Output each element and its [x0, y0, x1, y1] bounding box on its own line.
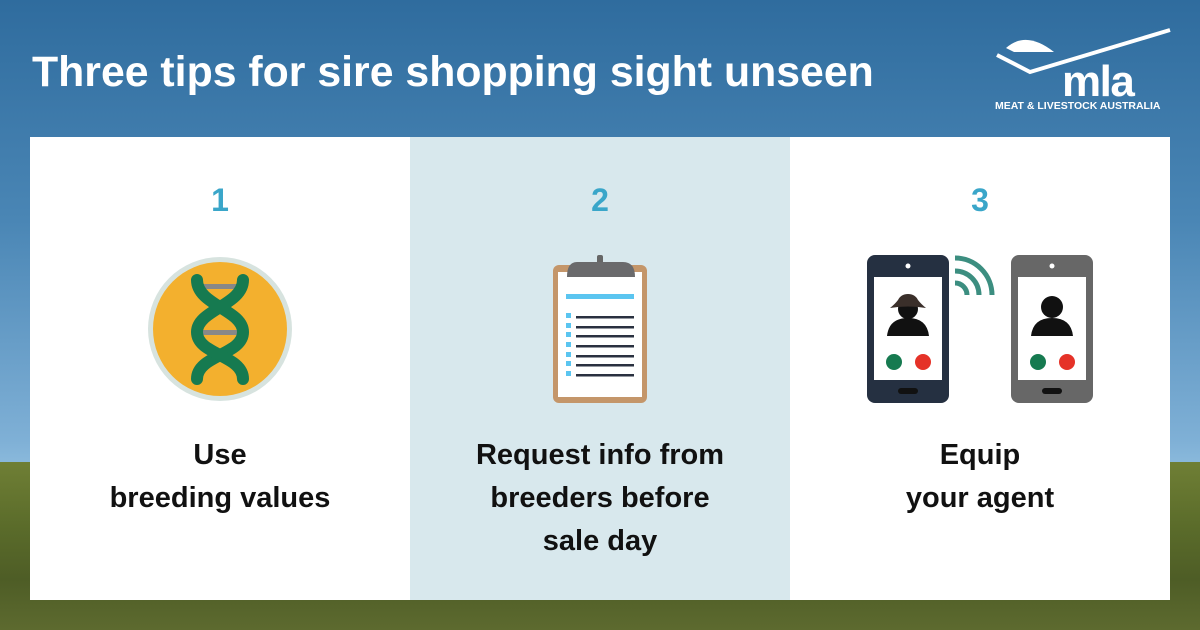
panel: 3: 3: [971, 182, 989, 218]
panel: 1: [30, 137, 410, 600]
panel: 2: breeders before: [490, 482, 710, 514]
panel: 1: Use: [193, 439, 247, 471]
logo: mla: MEAT & LIVESTOCK AUSTRALIA: [995, 100, 1160, 112]
panel: 1: 1: [211, 182, 229, 218]
panel: 3: Equip: [940, 439, 1020, 471]
icon: clipboard: [553, 255, 647, 403]
logo: mla: [995, 28, 1170, 112]
icon: dna: [148, 257, 292, 401]
panel: 3: your agent: [906, 482, 1054, 514]
panel: 2: [410, 137, 790, 600]
title: Three tips for sire shopping sight unseen: [32, 48, 874, 96]
icon: phones: [867, 255, 1093, 403]
panel: 3: [790, 137, 1170, 600]
panel: 1: breeding values: [110, 482, 330, 514]
panel: 2: Request info from: [476, 439, 724, 471]
panel: 2: 2: [591, 182, 609, 218]
panel: 2: sale day: [543, 525, 657, 557]
